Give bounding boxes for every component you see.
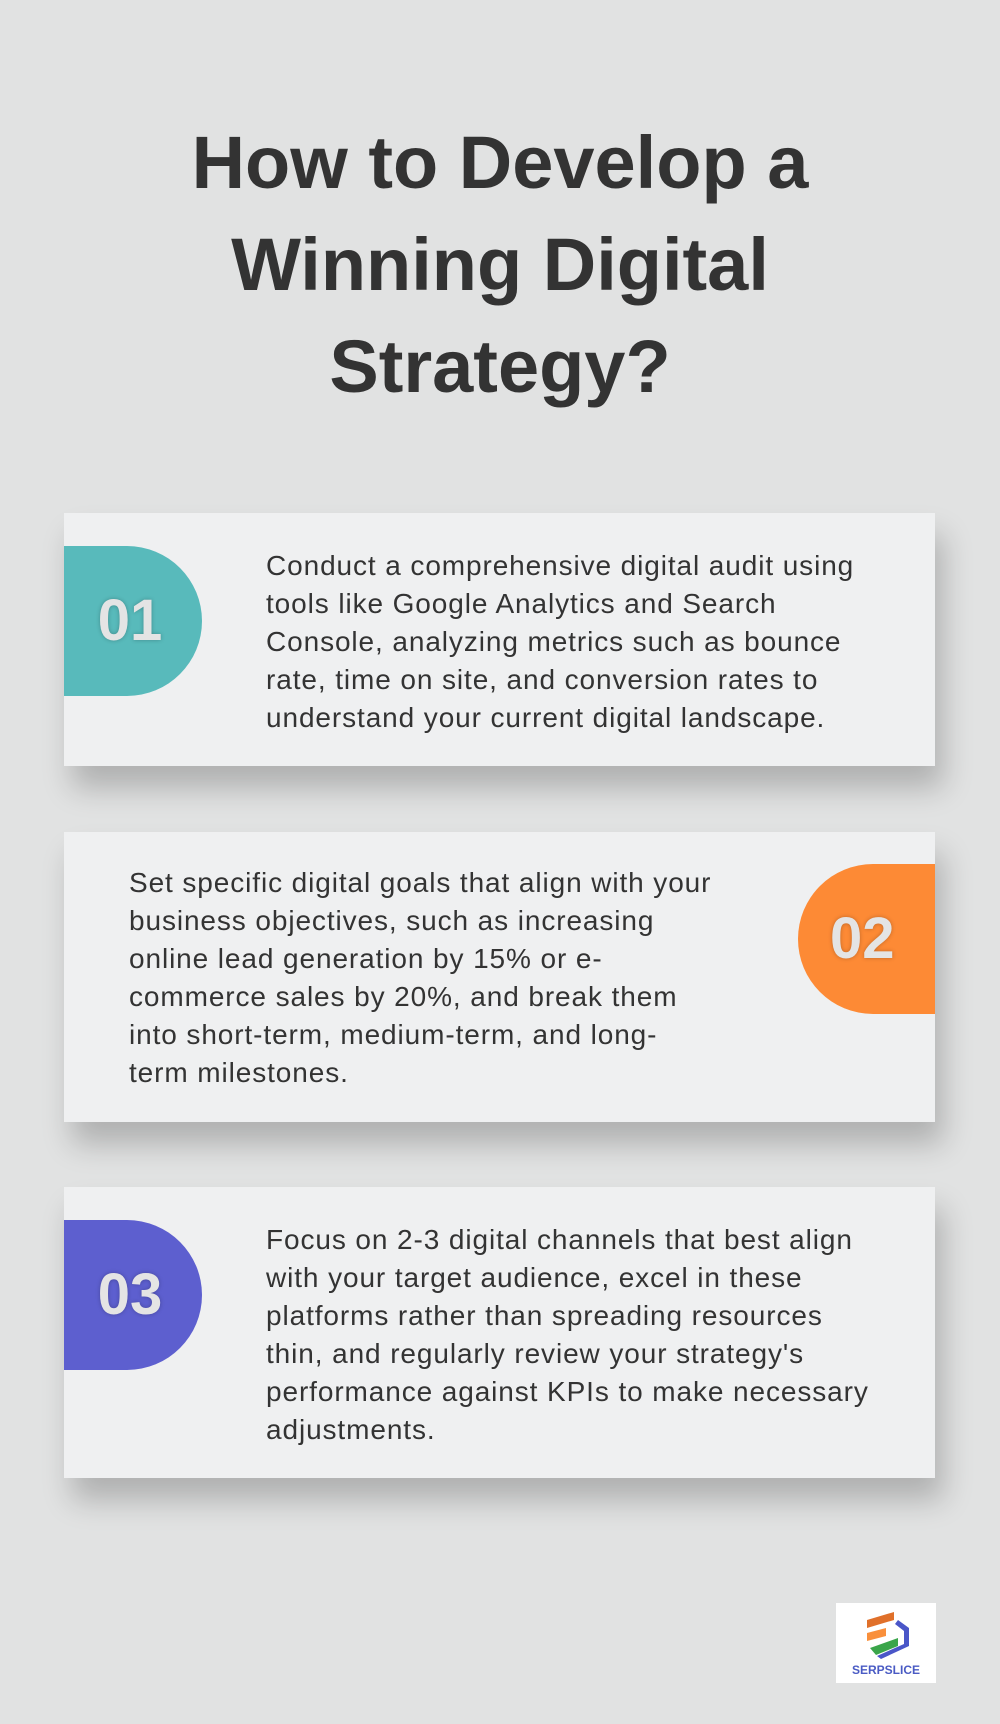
text step 2: commerce sales by 20%, and break them: [129, 981, 677, 1012]
logo: [836, 1603, 936, 1683]
badge 03: 03: [98, 1262, 162, 1327]
panel: step 2: [64, 832, 935, 1122]
text step 2: term milestones.: [129, 1057, 349, 1088]
text step 1: Console, analyzing metrics such as bounce: [266, 626, 841, 657]
text step 3: with your target audience, excel in these: [266, 1262, 803, 1293]
text step 3: Focus on 2-3 digital channels that best align: [266, 1224, 853, 1255]
text step 2: [129, 867, 711, 1088]
badge 01: [64, 546, 202, 696]
badge 02: [798, 864, 935, 1014]
badge 02: 02: [830, 906, 895, 971]
title: Winning Digital: [231, 223, 769, 306]
text step 2: business objectives, such as increasing: [129, 905, 654, 936]
text step 2: into short-term, medium-term, and long-: [129, 1019, 657, 1050]
logo: SERPSLICE: [852, 1663, 920, 1677]
badge 03: [64, 1220, 202, 1370]
text step 3: [266, 1224, 869, 1445]
text step 1: understand your current digital landscape.: [266, 702, 825, 733]
text step 3: performance against KPIs to make necessary: [266, 1376, 869, 1407]
text step 3: platforms rather than spreading resources: [266, 1300, 823, 1331]
text step 2: Set specific digital goals that align with your: [129, 867, 711, 898]
text step 1: [266, 550, 854, 733]
text step 3: adjustments.: [266, 1414, 436, 1445]
title: [192, 121, 809, 408]
text step 1: Conduct a comprehensive digital audit using: [266, 550, 854, 581]
text step 1: rate, time on site, and conversion rates to: [266, 664, 818, 695]
text step 3: thin, and regularly review your strategy's: [266, 1338, 804, 1369]
text step 2: online lead generation by 15% or e-: [129, 943, 603, 974]
badge 01: 01: [98, 588, 162, 653]
title: How to Develop a: [192, 121, 808, 204]
panel: step 1: [64, 513, 935, 766]
title: Strategy?: [329, 325, 671, 408]
panel: step 3: [64, 1187, 935, 1478]
text step 1: tools like Google Analytics and Search: [266, 588, 776, 619]
